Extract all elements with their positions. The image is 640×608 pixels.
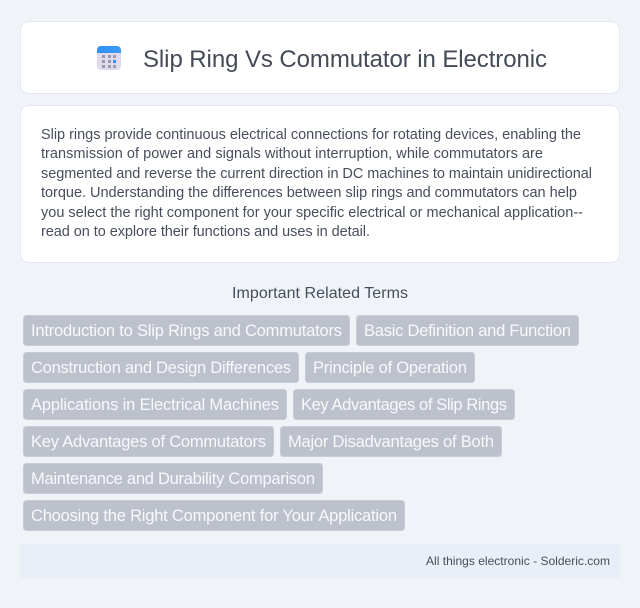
tag [24, 390, 286, 420]
tag: Maintenance and Durability Comparison [31, 470, 315, 488]
text block: description: transmission of power and signals without interruption, while commutators are [41, 146, 543, 162]
tag: Major Disadvantages of Both [288, 433, 494, 451]
tag [24, 500, 404, 530]
panel: intro paragraph [20, 106, 620, 262]
tag [24, 316, 350, 346]
text block: description: Slip rings provide continuous electrical connections for rotating devices, enabling the [41, 127, 581, 143]
tag [24, 426, 274, 456]
text block: description: segmented and reverse the current direction in DC machines to maintain unidirectional [41, 166, 592, 182]
text block: description: torque. Understanding the differences between slip rings and commutators can help [41, 185, 577, 201]
icon: calendar grid [97, 46, 121, 70]
tag: Choosing the Right Component for Your Application [31, 507, 397, 525]
tag [356, 316, 578, 346]
panel: related term tags [24, 316, 578, 530]
text block: description: read on to explore their functions and uses in detail. [41, 224, 370, 240]
tag [24, 352, 298, 382]
footer [20, 544, 620, 578]
tag [280, 426, 502, 456]
tag: Construction and Design Differences [31, 359, 291, 377]
footer: All things electronic - Solderic.com [426, 554, 610, 568]
tag [306, 352, 474, 382]
text block: description: you select the right component for your specific electrical or mechanical application-- [41, 205, 583, 221]
tag: Basic Definition and Function [364, 322, 571, 340]
tag [24, 464, 322, 494]
tag: Principle of Operation [313, 359, 467, 377]
title: Slip Ring Vs Commutator in Electronic [143, 46, 547, 73]
tag: Key Advantages of Slip Rings [301, 396, 507, 414]
text block: description [41, 127, 592, 240]
tag: Applications in Electrical Machines [31, 396, 279, 414]
tag: Key Advantages of Commutators [31, 433, 266, 451]
tag [294, 390, 514, 420]
heading: related terms: Important Related Terms [232, 285, 408, 302]
tag: Introduction to Slip Rings and Commutators [31, 322, 342, 340]
panel: title header [20, 22, 620, 94]
